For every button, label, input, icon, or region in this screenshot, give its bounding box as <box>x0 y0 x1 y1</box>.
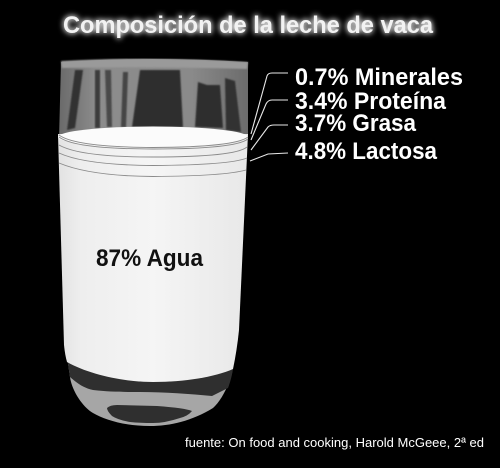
dark band of the base <box>66 350 236 396</box>
leader lines <box>250 73 288 161</box>
base dark ellipse <box>107 405 192 423</box>
milk layer lines <box>59 135 248 176</box>
title: Composición de la leche de vaca <box>63 12 434 39</box>
label: lactosa: 4.8% Lactosa <box>295 138 438 165</box>
glass upper part <box>59 59 248 140</box>
title: Composición de la leche de vaca <box>63 12 434 39</box>
label: grasa: 3.7% Grasa <box>295 110 417 137</box>
label: minerales: 0.7% Minerales <box>295 64 463 91</box>
glass base <box>66 350 236 426</box>
label: agua: 87% Agua <box>96 245 204 272</box>
source: fuente: On food and cooking, Harold McGeee, 2ª ed <box>185 435 484 450</box>
milk surface <box>58 126 248 148</box>
label: proteina: 3.4% Proteína <box>295 88 447 115</box>
milk body <box>58 134 248 382</box>
